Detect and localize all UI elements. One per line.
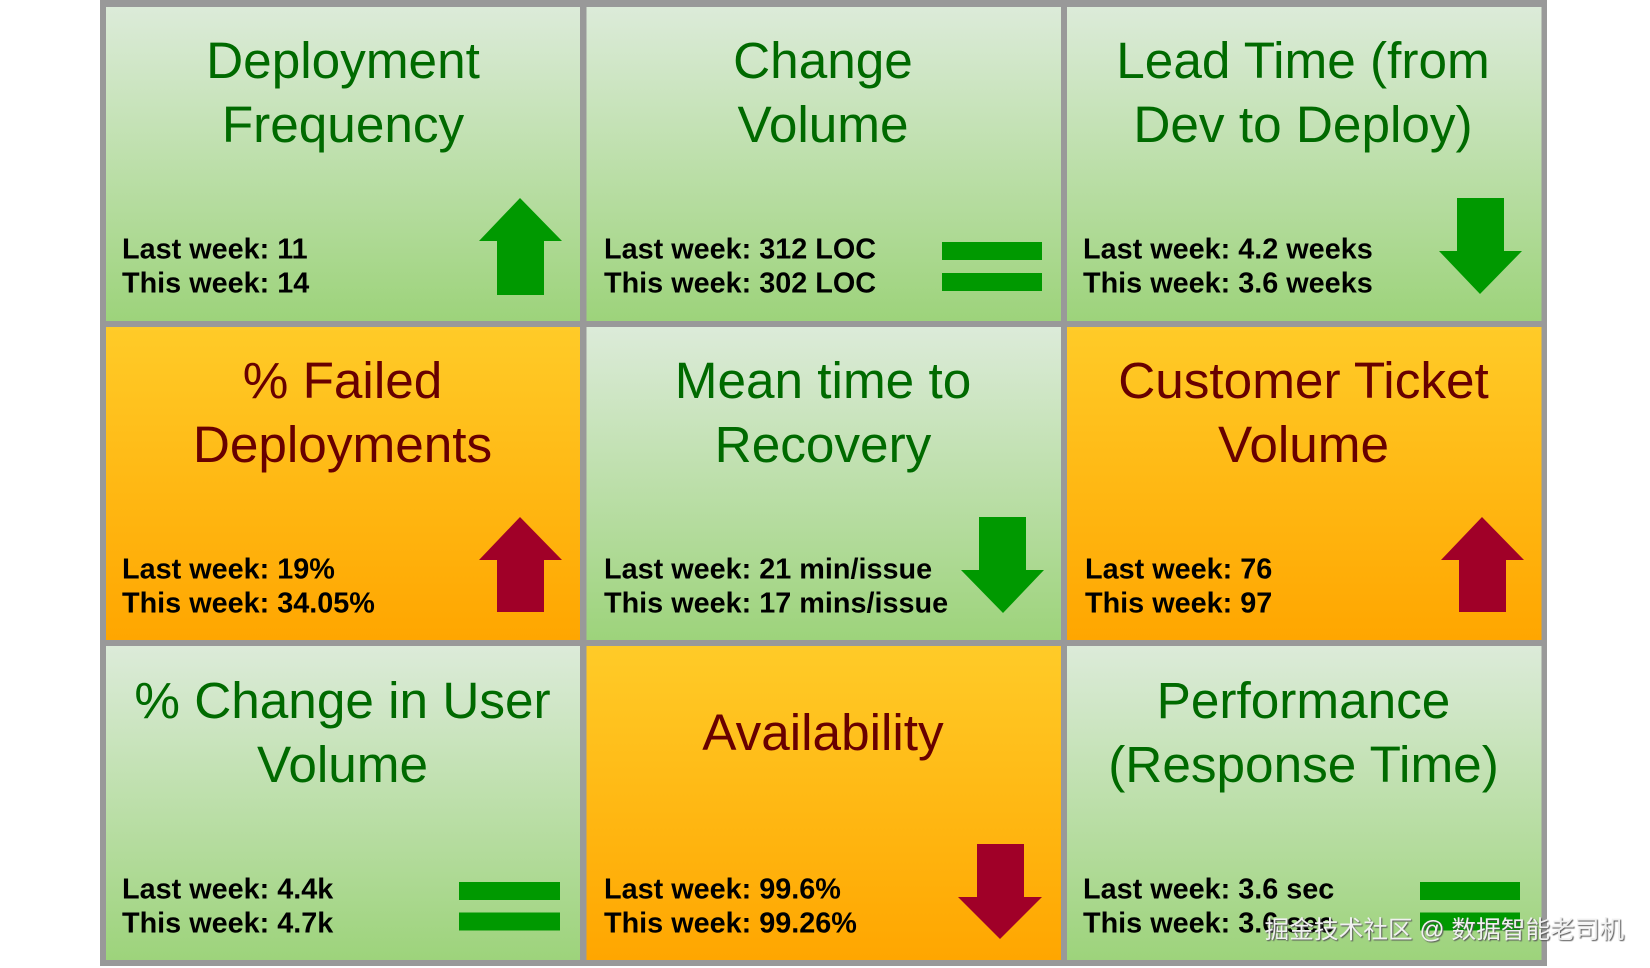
panel: Performance: [1067, 646, 1542, 960]
text: values: This week: 17 mins/issue: [604, 588, 948, 620]
heading: Change Volume: Volume: [737, 96, 909, 153]
text: values: This week: 3.6 weeks: [1083, 268, 1373, 300]
text: values: This week: 4.7k: [122, 908, 334, 940]
heading: Change Volume: Change: [733, 32, 913, 89]
icon: down arrow: [1439, 198, 1522, 294]
text: values: Last week: 4.2 weeks: [1083, 234, 1373, 266]
text: values: Last week: 3.6 sec: [1083, 874, 1334, 906]
icon: up arrow: [1441, 517, 1524, 612]
panel: % Failed Deployments: [106, 327, 580, 640]
text: values: This week: 302 LOC: [604, 268, 876, 300]
text: values: Last week: 99.6%: [604, 874, 841, 906]
text: values: Last week: 312 LOC: [604, 234, 876, 266]
text: values: This week: 3.6 sec: [1083, 908, 1334, 940]
icon: up arrow: [479, 517, 562, 612]
icon: down arrow: [961, 517, 1044, 613]
panel: Deployment Frequency: [106, 7, 580, 321]
icon: equals: [1420, 882, 1520, 930]
heading: % Change in User Volume: % Change in User: [134, 672, 551, 729]
text: values: Last week: 21 min/issue: [604, 554, 932, 586]
heading: % Change in User Volume: Volume: [257, 736, 428, 793]
heading: % Failed Deployments: % Failed: [243, 352, 442, 409]
heading: Performance (Response Time): (Response Time): [1108, 736, 1499, 793]
heading: Lead Time: Lead Time (from: [1116, 32, 1490, 89]
text: values: Last week: 19%: [122, 554, 335, 586]
heading: Availability: Availability: [702, 704, 944, 761]
heading: Deployment Frequency: Frequency: [222, 96, 465, 153]
text: values: Last week: 4.4k: [122, 874, 334, 906]
watermark: 掘金技术社区 @ 数据智能老司机: [1264, 916, 1625, 944]
panel: Change Volume: [586, 7, 1061, 321]
heading: Performance (Response Time): Performance: [1157, 672, 1450, 729]
heading: % Failed Deployments: Deployments: [193, 416, 492, 473]
text: values: This week: 14: [122, 268, 309, 300]
text: values: Last week: 11: [122, 234, 308, 266]
heading: Mean time to Recovery: Mean time to: [675, 352, 971, 409]
heading: Mean time to Recovery: Recovery: [715, 416, 932, 473]
text: values: This week: 99.26%: [604, 908, 857, 940]
heading: Deployment Frequency: Deployment: [206, 32, 480, 89]
icon: equals: [459, 882, 560, 930]
panel: Mean time to Recovery: [586, 327, 1061, 640]
icon: up arrow: [479, 198, 562, 295]
heading: Lead Time: Dev to Deploy): [1133, 96, 1473, 153]
text: values: Last week: 76: [1085, 554, 1272, 586]
text: values: This week: 97: [1085, 588, 1272, 620]
panel: Lead Time: [1067, 7, 1542, 321]
icon: equals: [942, 242, 1042, 291]
heading: Customer Ticket Volume: Customer Ticket: [1118, 352, 1489, 409]
panel: Availability: [586, 646, 1061, 960]
panel: Customer Ticket Volume: [1067, 327, 1542, 640]
heading: Customer Ticket Volume: Volume: [1218, 416, 1389, 473]
panel: % Change in User Volume: [106, 646, 580, 960]
icon: down arrow: [958, 844, 1042, 939]
text: values: This week: 34.05%: [122, 588, 375, 620]
